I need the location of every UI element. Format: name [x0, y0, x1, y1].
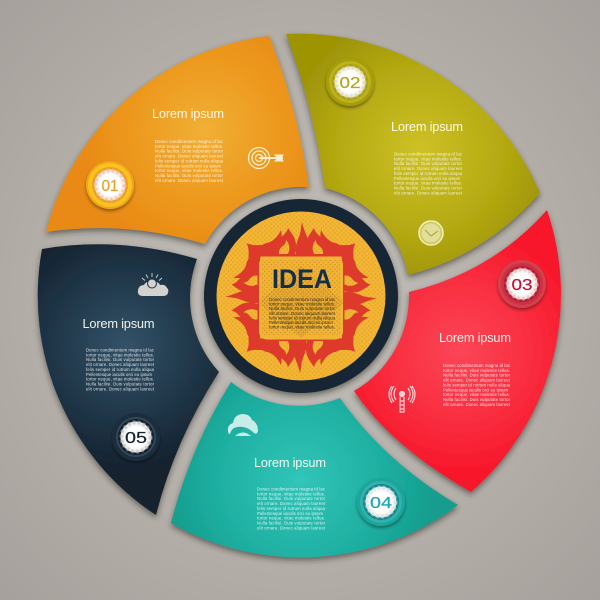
body text 01: tortor neque, vitae molestie tellus. [155, 168, 223, 173]
body text 03: tortor neque, vitae molestie tellus. [443, 392, 510, 397]
icon: target [248, 148, 283, 168]
body text 03: Nulla facilisi. Duis vulputate tortor [443, 373, 511, 378]
body text 04: elit ornare. Donec aliquam laoreet [257, 525, 326, 530]
body text 03: felis semper id rutrum nulla aliqua [443, 382, 511, 387]
body text 02: Pellentesque iaculis orci eu ipsum [394, 176, 460, 181]
body text 01: felis semper id rutrum nulla aliqua [155, 158, 224, 163]
segment shape 05 [38, 244, 219, 515]
body text 01: Donec condimentum magna id lac [155, 139, 223, 144]
inner halftone [262, 260, 340, 335]
body text 04: felis semper id rutrum nulla aliqua [257, 506, 326, 511]
panel: segment 04 teal [171, 382, 458, 557]
body text 03: Nulla facilisi. Duis vulputate tortor [443, 397, 511, 402]
body text 05: Donec condimentum magna id lac [86, 348, 154, 352]
body text 02: Donec condimentum magna id lac [394, 152, 462, 156]
flame frame [226, 222, 376, 373]
body text 05: felis semper id rutrum nulla aliqua [86, 367, 155, 372]
panel: segment 01 orange [46, 36, 309, 244]
body text 02: elit ornare. Donec aliquam laoreet [394, 166, 463, 171]
IDEA body text: tortor neque, vitae molestie tellus. [269, 325, 335, 330]
panel: segment 05 navy [38, 244, 219, 515]
halftone dots [216, 212, 386, 380]
panel: segment 02 olive [286, 34, 540, 275]
body text 02: felis semper id rutrum nulla aliqua [394, 171, 463, 176]
body text 04: tortor neque, vitae molestie tellus. [257, 516, 325, 521]
badge 03: 03 [512, 277, 533, 294]
body text 02: elit ornare. Donec aliquam laoreet [394, 190, 463, 195]
body text 04 [257, 486, 326, 530]
segment shape 04 [171, 382, 458, 557]
body text 01: elit ornare. Donec aliquam laoreet [155, 178, 224, 183]
body text 01: elit ornare. Donec aliquam laoreet [155, 154, 224, 159]
heading 01: Lorem ipsum [152, 106, 224, 121]
body text 01: tortor neque, vitae molestie tellus. [155, 144, 223, 149]
body text 01: Pellentesque iaculis orci eu ipsum [155, 163, 222, 168]
body text 05: elit ornare. Donec aliquam laoreet [86, 362, 155, 367]
body text 03: elit ornare. Donec aliquam laoreet [443, 402, 511, 407]
body text 04: Donec condimentum magna id lac [257, 486, 325, 492]
IDEA body text: Pellentesque iaculis orci eu ipsum [269, 320, 333, 325]
body text 05: tortor neque, vitae molestie tellus. [86, 377, 154, 382]
body text 03: Donec condimentum magna id lac [443, 363, 510, 368]
body text 03: elit ornare. Donec aliquam laoreet [443, 378, 511, 383]
badge 02: 02 [340, 75, 361, 92]
body text 05: elit ornare. Donec aliquam laoreet [86, 386, 155, 391]
IDEA body text: Donec condimentum magna id lac [269, 297, 336, 302]
IDEA title: IDEA [272, 264, 332, 294]
body text 05: Nulla facilisi. Duis vulputate tortor [86, 381, 155, 386]
body text 04: Nulla facilisi. Duis vulputate tortor [257, 496, 326, 501]
body text 03 [443, 363, 511, 407]
body text 05: Pellentesque iaculis orci eu ipsum [86, 372, 152, 377]
badge 04: 04 [370, 495, 392, 512]
heading 03: Lorem ipsum [439, 330, 511, 345]
body text 05 [86, 348, 155, 391]
icon: sun and cloud [138, 273, 168, 296]
IDEA body text: Nulla facilisi. Duis vulputate tortor [269, 306, 335, 311]
dark ring [204, 199, 398, 393]
badge 01: 01 [102, 178, 119, 195]
body text 04: tortor neque, vitae molestie tellus. [257, 491, 325, 496]
body text 01 [155, 139, 224, 183]
body text 05: Nulla facilisi. Duis vulputate tortor [86, 357, 155, 362]
body text 01: Nulla facilisi. Duis vulputate tortor [155, 173, 224, 178]
body text 02 [394, 152, 463, 195]
body text 01: Nulla facilisi. Duis vulputate tortor [155, 149, 224, 154]
IDEA body text: elit ornare. Donec aliquam laoreet [269, 311, 336, 316]
panel: central IDEA medallion [204, 199, 398, 393]
heading 04: Lorem ipsum [254, 455, 326, 470]
panel: segment 03 red [354, 210, 561, 492]
body text 03: tortor neque, vitae molestie tellus. [443, 368, 510, 373]
body text 02: Nulla facilisi. Duis vulputate tortor [394, 161, 463, 166]
IDEA body text: tortor neque, vitae molestie tellus. [269, 302, 335, 307]
body text 04: Pellentesque iaculis orci eu ipsum [257, 511, 324, 516]
body text 04: Nulla facilisi. Duis vulputate tortor [257, 520, 326, 525]
inner shaded diamond [258, 266, 345, 338]
icon: antenna [389, 386, 415, 412]
body text 02: tortor neque, vitae molestie tellus. [394, 156, 462, 161]
body text 05: tortor neque, vitae molestie tellus. [86, 352, 154, 357]
segment shape 03 [354, 210, 561, 492]
IDEA body text [269, 297, 336, 330]
badge 03 [498, 260, 546, 308]
yellow disc [216, 212, 386, 380]
body text 03: Pellentesque iaculis orci eu ipsum [443, 387, 508, 392]
heading 05: Lorem ipsum [82, 316, 154, 331]
heading 02: Lorem ipsum [391, 119, 463, 134]
segment shape 02 [286, 34, 540, 275]
icon: clock [419, 221, 443, 245]
body text 04: elit ornare. Donec aliquam laoreet [257, 501, 326, 506]
body text 02: Nulla facilisi. Duis vulputate tortor [394, 185, 463, 190]
badge 01 [86, 161, 134, 209]
icon: cloud [228, 414, 258, 436]
IDEA body text: felis semper id rutrum nulla aliqua [269, 315, 335, 320]
badge 04 [357, 478, 405, 526]
badge 05: 05 [125, 430, 147, 447]
body text 02: tortor neque, vitae molestie tellus. [394, 181, 462, 186]
segment shape 01 [46, 36, 309, 244]
badge 02 [326, 58, 374, 106]
inner plate [259, 256, 343, 340]
badge 05 [112, 413, 160, 461]
